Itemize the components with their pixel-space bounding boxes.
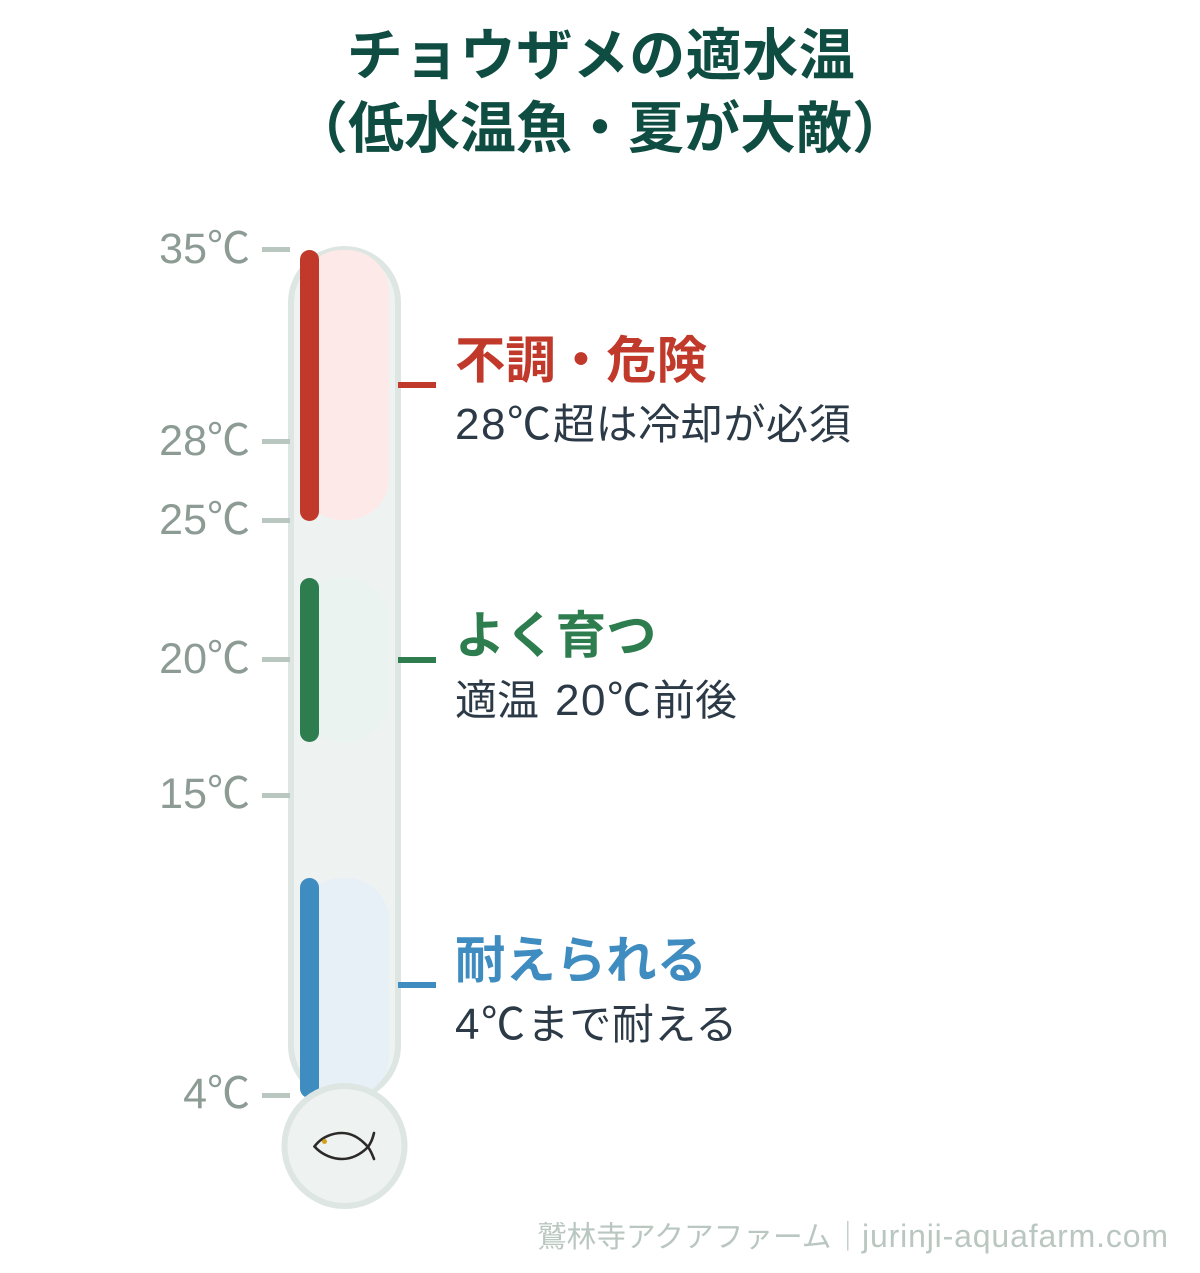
callout: danger: 28℃ — [455, 400, 552, 449]
callout: optimal: 20℃ — [555, 676, 652, 725]
tick: 15 — [159, 770, 290, 818]
callout: danger — [398, 332, 851, 449]
callout: optimal — [398, 607, 737, 725]
zone bar: danger — [300, 250, 319, 521]
tick: 35 — [159, 225, 290, 273]
icon: fish eye — [322, 1139, 327, 1144]
temperature scale — [159, 225, 290, 1118]
icon: fish — [314, 1133, 374, 1159]
callout: danger: 超は冷却が必須 — [553, 401, 851, 448]
footer credit: ｜ — [833, 1221, 863, 1254]
tick: 35: 35℃ — [159, 225, 250, 273]
callout: danger: 不調・危険 — [455, 332, 707, 389]
tick: 25: 25℃ — [159, 496, 250, 544]
title: チョウザメの適水温 — [347, 24, 855, 87]
callout: tolerable: 4℃ — [455, 1000, 526, 1049]
thermometer tube — [291, 249, 398, 1099]
callout: optimal: 適温 — [455, 677, 539, 724]
title — [292, 24, 908, 160]
callout: tolerable — [398, 932, 738, 1049]
tick: 4 — [183, 1070, 290, 1118]
tick: 28 — [159, 417, 290, 465]
callout: tolerable: 耐えられる — [455, 932, 707, 989]
title: （低水温魚・夏が大敵） — [292, 97, 908, 160]
tick: 4: 4℃ — [183, 1070, 250, 1118]
tick: 20: 20℃ — [159, 635, 250, 683]
callout: optimal: よく育つ — [455, 607, 657, 664]
zone background: optimal — [300, 578, 389, 742]
tick: 15: 15℃ — [159, 770, 250, 818]
callout: optimal: 前後 — [653, 677, 737, 724]
footer credit: jurinji-aquafarm.com — [861, 1218, 1169, 1254]
tick: 20 — [159, 635, 290, 683]
callout: tolerable: まで耐える — [527, 1001, 738, 1048]
zone bar: tolerable — [300, 878, 319, 1098]
zone background: danger — [300, 250, 389, 520]
thermometer bulb — [284, 1086, 404, 1206]
tick: 28: 28℃ — [159, 417, 250, 465]
zone background: tolerable — [300, 878, 389, 1098]
tick: 25 — [159, 496, 290, 544]
zone bar: optimal — [300, 578, 319, 742]
thermometer — [284, 249, 404, 1206]
footer credit: 鷲林寺アクアファーム — [537, 1221, 832, 1254]
